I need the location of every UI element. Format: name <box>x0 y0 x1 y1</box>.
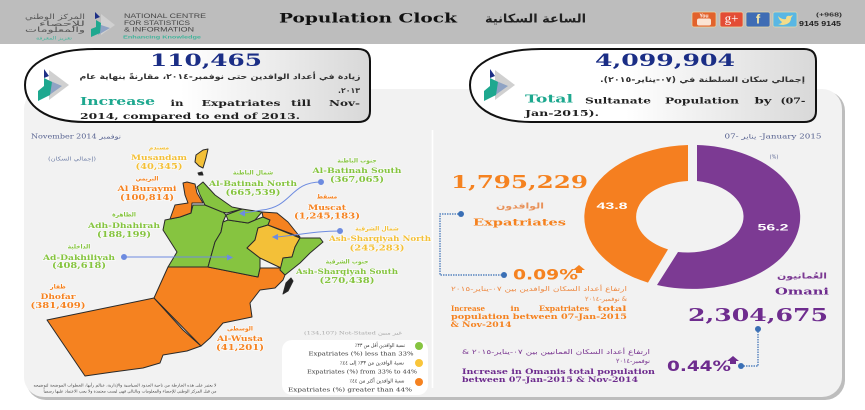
legend item: less than 33%: نسبة الوافدين أقل من ٣٣٪ <box>355 341 405 349</box>
legend item: 33% to 44%: نسبة الوافدين من ٣٣٪ إلى ٤٤٪ <box>340 360 404 366</box>
region: Ash-Sharqiyah South <box>280 238 323 275</box>
label: Al-Batinah North: Al-Batinah North <box>208 179 298 188</box>
region: Ad-Dakhiliyah <box>208 217 270 277</box>
map disclaimer: من قبل المركز الوطني للإحصاء والمعلومات وبالتالي فهي ليست معتمدة ولا يجب الاعتماد عليها رسمياً <box>43 388 216 394</box>
text: Expatriates increase: in <box>510 304 520 313</box>
stat: Expatriates total: الوافدون <box>496 202 544 210</box>
label: Al-Batinah South: جنوب الباطنة <box>337 158 377 164</box>
icon: youtube: You <box>699 13 709 19</box>
callout: total population <box>470 49 816 122</box>
English description: 2014, compared to end of 2013. <box>80 112 300 122</box>
English description: Increase <box>80 95 155 108</box>
region: Al-Batinah South <box>226 209 262 223</box>
label: Adh-Dhahirah: (188,199) <box>97 229 151 239</box>
Arabic description: زيادة في أعداد الوافدين حتى نوفمبر-٢٠١٤، مقارنةً بنهاية عام <box>80 71 361 81</box>
map disclaimer <box>34 382 217 394</box>
icon: twitter <box>773 12 797 27</box>
arrow: Ad-Dakhiliyah pointer <box>122 254 232 260</box>
label: Al-Batinah North <box>208 170 298 197</box>
English description <box>80 95 361 122</box>
legend item: 33% to 44% <box>307 359 423 376</box>
icon: google plus: g+ <box>725 10 738 25</box>
stat: Omani total: العُمانيون <box>777 272 827 280</box>
connector: Expatriates dotted line <box>440 211 507 278</box>
label: Ad-Dakhiliyah: (408,618) <box>52 260 106 270</box>
arrow: Ash-Sharqiyah North pointer <box>273 228 342 240</box>
stat: Omanis 0.44% <box>667 356 739 375</box>
region: Al-Batinah North <box>197 182 242 213</box>
icon: callout logo <box>484 69 515 101</box>
label: Al-Wusta: (41,201) <box>216 342 264 352</box>
label: Ash-Sharqiyah South: (270,438) <box>320 275 375 285</box>
label: Muscat: Muscat <box>308 203 347 212</box>
label: Dhofar <box>30 284 86 310</box>
connector: Omanis dotted line <box>738 326 761 369</box>
label: Al-Wusta: Al-Wusta <box>216 334 263 343</box>
logo: National Centre for Statistics and Information: NATIONAL CENTRE <box>124 13 207 20</box>
label: Ad-Dakhiliyah: Ad-Dakhiliyah <box>42 253 116 262</box>
text: Expatriates increase: population between 07-Jan-2015 <box>451 312 627 321</box>
phone number: (+968) <box>816 12 842 18</box>
text: Omanis increase: Increase in Omanis total population <box>462 367 655 376</box>
label: Al Buraymi: البريمي <box>136 176 158 182</box>
label: Al-Batinah North: شمال الباطنة <box>233 170 273 176</box>
Arabic description: .٢٠١٣ <box>338 86 360 95</box>
region: Dhofar <box>47 298 201 376</box>
label: Muscat: مسقط <box>317 194 338 200</box>
logo: National Centre for Statistics and Information: تعزيز المعرفة <box>36 36 73 42</box>
label: Ash-Sharqiyah North: Ash-Sharqiyah North <box>328 234 432 243</box>
logo: National Centre for Statistics and Information: والمعلومات <box>25 26 85 34</box>
logo: National Centre for Statistics and Information: & INFORMATION <box>124 26 194 33</box>
region: Musandam <box>195 149 208 168</box>
label: Al Buraymi: Al Buraymi <box>116 184 177 193</box>
logo: National Centre for Statistics and Information: Enhancing Knowledge <box>123 35 202 40</box>
label: Adh-Dhahirah: الظاهرة <box>112 212 136 218</box>
English description: by <box>754 96 773 106</box>
segment: Omani 56.2: 56.2 <box>758 222 788 232</box>
label: Ad-Dakhiliyah <box>42 244 116 270</box>
text: Expatriates increase: Expatriates <box>539 304 589 313</box>
label: Adh-Dhahirah: Adh-Dhahirah <box>87 221 161 230</box>
region: Ash-Sharqiyah North <box>247 225 300 268</box>
legend item: greater than 44%: Expatriates (%) greater than 44% <box>288 386 412 394</box>
legend item: greater than 44% <box>288 376 423 394</box>
date: November 2014: November 2014 نوفمبر <box>31 134 121 140</box>
logo: National Centre for Statistics and Information: للإحصاء <box>39 20 85 28</box>
label: Ash-Sharqiyah South: Ash-Sharqiyah South <box>295 267 399 276</box>
English description: Population <box>665 96 739 106</box>
title: Arabic: الساعة السكانية <box>485 12 586 26</box>
label: Ad-Dakhiliyah: الداخلية <box>68 244 90 250</box>
Arabic description <box>80 71 361 95</box>
stat: Omani total <box>688 272 830 326</box>
legend <box>282 340 428 395</box>
title: Population Clock: Population Clock <box>279 12 458 26</box>
label: Ash-Sharqiyah North <box>328 226 432 252</box>
label: Adh-Dhahirah <box>87 212 161 239</box>
English description: Expatriates <box>202 99 281 109</box>
label: Dhofar: (381,409) <box>30 300 86 310</box>
English description: Sultanate <box>585 96 652 106</box>
label: Musandam: (40,345) <box>136 161 183 171</box>
English description: (07- <box>780 96 806 106</box>
text: Expatriates increase: total <box>598 304 627 313</box>
text: Expatriates increase <box>450 284 627 329</box>
phone number <box>799 12 842 28</box>
segment: Expatriates 43.8: 43.8 <box>596 201 628 211</box>
text: Expatriates increase: ارتفاع أعداد السكان الوافدين بين ٠٧-يناير-٢٠١٥ <box>451 284 627 293</box>
Arabic description: إجمالي سكان السلطنة في (٠٧-يناير-٢٠١٥). <box>600 75 805 84</box>
logo: National Centre for Statistics and Information: FOR STATISTICS <box>124 20 191 27</box>
map of Oman <box>47 149 323 376</box>
label: Ash-Sharqiyah South <box>295 258 399 285</box>
header bar <box>0 0 865 44</box>
label: Muscat: (1,245,183) <box>294 210 360 220</box>
stat: Expatriates total <box>451 172 588 228</box>
logo: National Centre for Statistics and Information: المركز الوطني <box>25 13 85 21</box>
English description: Nov- <box>329 99 361 109</box>
English description: Total <box>525 92 573 106</box>
label: Al-Wusta: الوسطى <box>227 326 253 332</box>
map disclaimer: لا يعتبر على هذه الخارطة من ناحية الحدود السياسية والإدارية، عنالم رأيها، الخطوات الموضحة لتوضيحه <box>34 382 217 388</box>
panel: main grey background <box>24 89 845 400</box>
region: Al Buraymi <box>170 182 203 219</box>
stat: Expatriates 0.09% <box>513 265 585 284</box>
phone number: 9145 9145 <box>799 19 841 28</box>
logo: National Centre for Statistics and Information <box>25 12 207 42</box>
icon: youtube <box>692 12 716 27</box>
segment: Omani 56.2 <box>657 145 800 289</box>
icon: facebook <box>746 11 770 27</box>
label: Al-Batinah North: (665,539) <box>226 187 281 197</box>
donut chart <box>584 145 800 289</box>
text: Expatriates increase: Increase <box>451 304 486 313</box>
English description <box>524 92 806 119</box>
label: Musandam: مسندم <box>149 144 169 152</box>
date: January 2015: 07- يناير -January 2015 <box>724 134 822 140</box>
label: Ash-Sharqiyah North: (245,283) <box>350 242 405 252</box>
legend item: less than 33%: Expatriates (%) less than 33% <box>308 350 414 358</box>
label: Al Buraymi: (100,814) <box>120 192 174 202</box>
icon: callout logo <box>38 69 69 101</box>
legend item: 33% to 44%: Expatriates (%) from 33% to 44% <box>307 368 417 376</box>
text: Expatriates increase: & Nov-2014 <box>450 320 512 329</box>
stat: Expatriates 0.09%: 0.09% <box>513 268 578 284</box>
label: Al-Batinah South: (367,065) <box>330 174 384 184</box>
region: Muscat <box>262 212 300 237</box>
label: Al-Wusta <box>216 326 264 352</box>
English description: till <box>291 99 312 109</box>
region: Ad-Dhahirah <box>163 205 226 267</box>
not stated note: (134,107) Not-Stated غير مبين <box>304 330 402 336</box>
big number: 110,465 <box>150 51 262 71</box>
label: Ash-Sharqiyah South: جنوب الشرقية <box>326 258 368 266</box>
label: Dhofar: Dhofar <box>40 292 77 301</box>
label: Dhofar: ظفار <box>49 284 66 290</box>
icon: facebook: f <box>756 11 761 26</box>
text: Omanis increase <box>462 347 655 384</box>
region: Al-Wusta <box>154 267 285 346</box>
label: Ash-Sharqiyah North: شمال الشرقية <box>355 226 399 232</box>
label: Musandam: Musandam <box>131 153 187 162</box>
stat: Omani total: 2,304,675 <box>688 305 828 326</box>
label: Muscat <box>294 194 360 220</box>
English description: Jan-2015). <box>524 108 599 119</box>
stat: Expatriates total: Expatriates <box>473 218 566 228</box>
English description: in <box>170 99 184 109</box>
segment: Expatriates 43.8 <box>584 145 688 283</box>
text: Omanis increase: نوفمبر-٢٠١٤ <box>616 357 650 365</box>
icon: up arrow <box>727 356 739 364</box>
stat: Omani total: Omani <box>775 286 830 298</box>
label: Al Buraymi <box>116 176 177 202</box>
arrow: Al-Batinah South pointer <box>240 180 324 216</box>
text: Omanis increase: between 07-Jan-2015 & Nov-2014 <box>462 375 638 384</box>
stat: Omanis 0.44%: 0.44% <box>667 359 731 375</box>
donut unit: (%) <box>770 154 778 160</box>
big number: 4,099,904 <box>595 51 735 71</box>
text: Omanis increase: ارتفاع أعداد السكان العمانيين بين ٠٧-يناير-٢٠١٥ & <box>462 347 650 356</box>
stat: Expatriates total: 1,795,229 <box>451 172 588 193</box>
icon: google plus <box>720 10 743 27</box>
map subtitle: total population: (إجمالي السكان) <box>48 156 96 162</box>
islands <box>198 172 203 175</box>
icon: up arrow <box>573 265 585 273</box>
label: Al-Batinah South <box>311 158 402 184</box>
label: Al-Batinah South: Al-Batinah South <box>311 166 402 175</box>
callout: expatriates increase <box>25 49 370 122</box>
legend item: less than 33% <box>308 341 423 358</box>
label: Musandam <box>131 144 187 171</box>
text: Expatriates increase: & نوفمبر-٢٠١٤ <box>585 295 627 303</box>
legend item: greater than 44%: نسبة الوافدين أكثر من ٤٤٪ <box>350 376 405 384</box>
